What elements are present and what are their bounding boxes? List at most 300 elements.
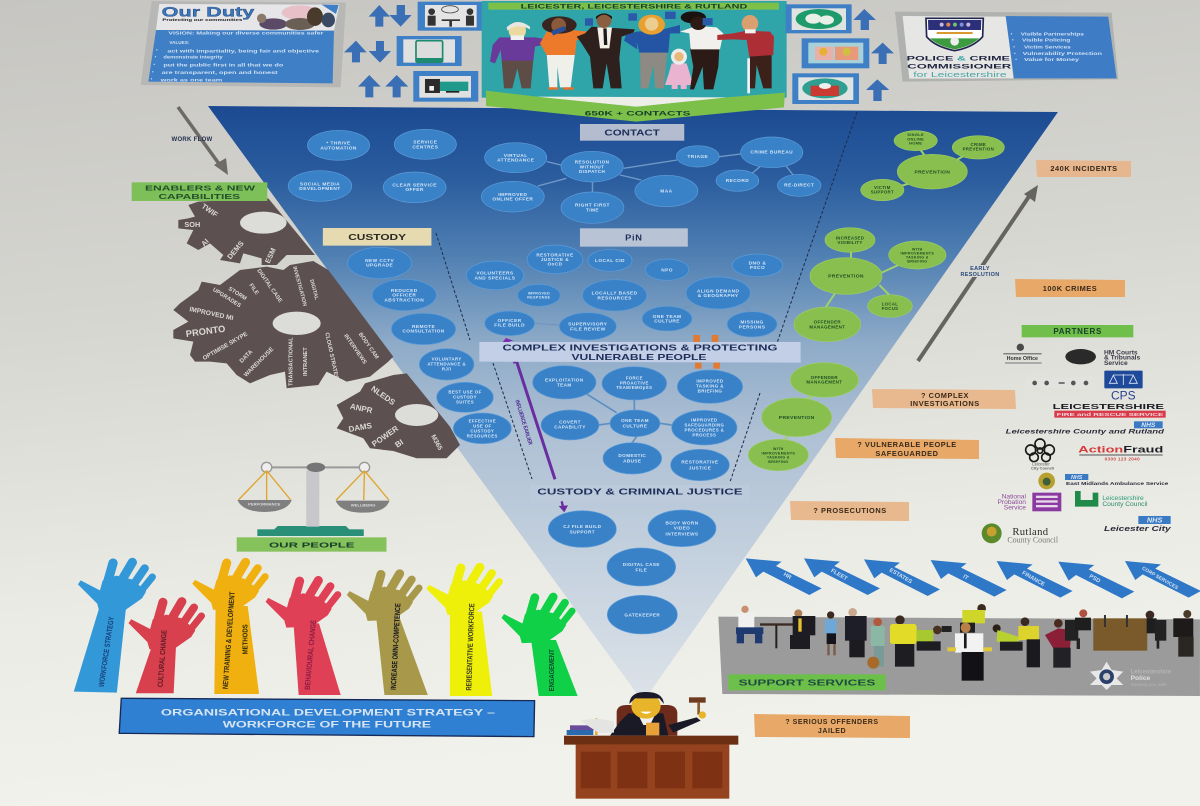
bubble: virtual attendance: VIRTUAL xyxy=(504,153,528,158)
bubble: domestic abuse: ABUSE xyxy=(623,458,641,463)
heading: enablers and new capabilities xyxy=(132,182,267,201)
banner: organisational development strategy: WORKFORCE OF THE FUTURE xyxy=(223,720,431,731)
arrow: IT: IT xyxy=(962,574,970,582)
heading: partners: PARTNERS xyxy=(1053,327,1102,336)
bubble: single online home: SINGLE xyxy=(907,132,924,137)
hand: new training and development methods xyxy=(192,562,265,694)
bubble: prevention: PREVENTION xyxy=(828,274,864,280)
gear: top: SOH xyxy=(184,220,200,229)
books and small scales xyxy=(567,718,614,735)
heading: contact xyxy=(580,124,684,141)
bubble: supervisory file review: SUPERVISORY xyxy=(568,322,608,327)
logo: National Probation Service: Probation xyxy=(997,499,1026,506)
logo: Leicester City Council: City Council xyxy=(1031,465,1054,470)
heading: complex investigations and protecting vulnerable people: COMPLEX INVESTIGATIONS & PROTECTING xyxy=(502,342,778,352)
bubble: right first time xyxy=(561,192,624,223)
bubble: align demand and geography: & GEOGRAPHY xyxy=(698,293,739,298)
logo: Rutland County Council xyxy=(982,523,1059,544)
logo: East Midlands Ambulance Service xyxy=(1038,473,1169,489)
gear: middle: INTERVIEWS xyxy=(342,333,367,366)
vision and values text: • xyxy=(155,55,157,60)
bubble: single online home xyxy=(894,131,937,151)
hand: new training and development methods: METHODS xyxy=(241,624,250,654)
bubble: volunteers and specials: VOLUNTEERS xyxy=(476,271,514,276)
priorities list: Victim Services xyxy=(1024,44,1071,49)
bubble: local focus xyxy=(868,295,912,317)
banner: 650K + contacts: 650K + CONTACTS xyxy=(585,110,691,117)
vision and values text: put the public first in all that we do xyxy=(163,63,284,68)
hand: new training and development methods: NEW TRAINING & DEVELOPMENT xyxy=(221,591,237,689)
gear: middle: DIGITAL CASE xyxy=(255,268,283,304)
bubble: right first time: RIGHT FIRST xyxy=(575,203,610,208)
logo text: police and crime commissioner for Leicestershire: COMMISSIONER xyxy=(907,64,1012,71)
bubble: resolution without dispatch xyxy=(561,151,623,182)
bubble: virtual attendance xyxy=(485,143,547,173)
bubble: effective use of custody resources: RESOURCES xyxy=(467,434,498,439)
heading: partners xyxy=(1022,325,1133,337)
bubble: officer file build: OFFICER xyxy=(498,318,522,323)
bubble: CJ file build support: CJ FILE BUILD xyxy=(563,524,602,529)
bubble: exploitation team: TEAM xyxy=(557,383,572,388)
bubble: one team culture: ONE TEAM xyxy=(653,314,682,319)
PiN connector lines xyxy=(534,295,750,325)
bubble: best use of custody suites: SUITES xyxy=(456,400,474,405)
bubble: resolution without dispatch: WITHOUT xyxy=(580,164,604,169)
gear: middle: BODY CAM xyxy=(357,332,380,361)
staff figures xyxy=(736,604,1194,681)
gear: bottom xyxy=(337,373,460,458)
bubble: remote consultation: CONSULTATION xyxy=(402,329,445,334)
bubble: locally based resources xyxy=(582,280,647,311)
heading: enablers and new capabilities: CAPABILITIES xyxy=(158,194,241,201)
gear: bottom: BI xyxy=(393,438,405,450)
panel: left contact channel icons xyxy=(344,2,482,102)
hand: representative workforce xyxy=(426,567,499,696)
bubble: new CCTV upgrade: NEW CCTV xyxy=(365,258,395,263)
logo: Home Office: Home Office xyxy=(1007,356,1038,362)
bubble: improved tasking and briefing: TASKING & xyxy=(696,384,724,389)
bubble: effective use of custody resources xyxy=(453,413,511,444)
gear: bottom: M365 xyxy=(429,434,443,452)
panel: judge at bench xyxy=(564,692,738,799)
figure: woman in blue xyxy=(624,12,680,88)
hand: behavioural change xyxy=(266,580,341,695)
heading: custody and criminal justice: CUSTODY & CRIMINAL JUSTICE xyxy=(537,486,743,496)
logo: East Midlands Ambulance Service: East Midlands Ambulance Service xyxy=(1066,481,1169,486)
bubble: offender management: OFFENDER xyxy=(814,320,841,325)
arrow: HR xyxy=(746,558,822,595)
logo: Leicestershire Police: Keeping you safe xyxy=(1131,682,1167,687)
logo: National Probation Service: National xyxy=(1002,493,1027,500)
bubble: improved safeguarding: IMPROVED xyxy=(691,418,717,423)
bubble: offender management: MANAGEMENT xyxy=(806,380,842,385)
outcome: serious offenders jailed: JAILED xyxy=(818,728,846,735)
arrow: corp services: CORP SERVICES xyxy=(1141,566,1180,592)
priorities list: Value for Money xyxy=(1024,57,1080,62)
bubble: clear service offer: OFFER xyxy=(405,187,424,192)
priorities list: Vulnerability Protection xyxy=(1023,51,1102,56)
heading: custody and criminal justice xyxy=(530,485,750,502)
connector lines xyxy=(538,154,793,193)
arrows: up and down xyxy=(344,5,412,97)
gear: middle: DIGITAL xyxy=(308,279,319,301)
bubble: volunteers and specials xyxy=(466,261,524,290)
bubble: local CID xyxy=(588,249,632,271)
priorities list: • xyxy=(1012,38,1014,43)
logo: Leicestershire Police: Police xyxy=(1131,675,1151,682)
bubble: triage: TRIAGE xyxy=(687,154,708,159)
gear: top: ESM xyxy=(263,246,278,265)
bubble: with improvements tasking and briefing: TASKING & xyxy=(906,256,929,260)
bubble: reduced officer abstraction: OFFICER xyxy=(392,293,417,298)
bubble: covert capability: COVERT xyxy=(559,420,581,425)
bubble: restorative justice: RESTORATIVE xyxy=(681,460,719,465)
bubble: new CCTV upgrade xyxy=(347,247,412,279)
icon: desktop computer xyxy=(413,71,478,102)
gear: bottom: NLEDS xyxy=(369,384,397,407)
bubble: one team culture: CULTURE xyxy=(654,319,680,324)
logo: Action Fraud xyxy=(1078,444,1163,461)
logo: CPS: CPS xyxy=(1111,388,1136,402)
collage of people xyxy=(257,5,339,30)
logo: National Probation Service: Service xyxy=(1004,504,1026,511)
bubble: body worn video interviews: BODY WORN xyxy=(665,520,699,525)
arrow: early resolution xyxy=(918,185,1038,361)
grey band xyxy=(718,617,1200,696)
gear: middle: CLOUD STRATEGY xyxy=(323,332,340,384)
bubble: missing persons xyxy=(727,312,777,337)
bubble: victim support xyxy=(861,179,904,201)
bubble: offender management xyxy=(790,363,858,397)
bubble: align demand and geography xyxy=(686,277,750,309)
judge chair xyxy=(617,705,677,736)
panel: title illustration, Leicester Leicestershire and Rutland xyxy=(482,1,787,122)
gear: middle: TRANSACTIONAL xyxy=(289,337,295,386)
gear: top: TWIF xyxy=(200,201,220,219)
logo strip: small crests xyxy=(1027,377,1093,388)
bubble: local focus: LOCAL xyxy=(882,301,898,306)
logo text: police and crime commissioner for Leicestershire xyxy=(907,56,1012,79)
gear: middle: INTRANET xyxy=(303,347,309,376)
bubble: improved response xyxy=(517,284,560,306)
priorities list: Visible Policing xyxy=(1022,38,1070,43)
bubble: voluntary attendance: ATTENDANCE & xyxy=(427,362,466,367)
logo: National Probation Service xyxy=(997,493,1061,511)
figure: child in pink xyxy=(665,49,693,89)
panel frame xyxy=(895,12,1118,82)
gear: bottom: POWER xyxy=(370,424,400,449)
bubble: prevention: PREVENTION xyxy=(779,415,815,421)
gear: middle: WAREHOUSE xyxy=(243,347,275,379)
bubble: victim support: SUPPORT xyxy=(871,190,894,195)
bubble: prevention xyxy=(810,258,882,294)
arrows: up xyxy=(853,9,894,101)
bubble: clear service offer: CLEAR SERVICE xyxy=(392,182,437,187)
icon: meeting xyxy=(418,2,482,31)
heading: custody: CUSTODY xyxy=(348,232,406,242)
icon: video call xyxy=(802,38,869,68)
logo: Leicestershire County Council xyxy=(1075,491,1148,508)
connector lines xyxy=(785,150,963,440)
bubble: thrive automation xyxy=(307,130,370,160)
heading: Leicester, Leicestershire and Rutland: LEICESTER, LEICESTERSHIRE & RUTLAND xyxy=(521,4,749,10)
bubble: MAA: MAA xyxy=(660,188,673,193)
figure: person in white top xyxy=(680,11,723,89)
gear: middle: STORM xyxy=(227,286,248,302)
arrow: early resolution: EARLY xyxy=(970,266,990,272)
logo: HM Courts and Tribunals Service: Service xyxy=(1104,360,1128,367)
outcome: serious offenders jailed xyxy=(754,714,910,738)
hand: workforce strategy: WORKFORCE STRATEGY xyxy=(97,616,116,688)
bubble: DNO and PSCO xyxy=(732,254,783,277)
outcome: vulnerable people safeguarded: SAFEGUARDED xyxy=(875,449,939,458)
heading: PiN: PiN xyxy=(625,233,643,242)
heading: enablers and new capabilities: ENABLERS & NEW xyxy=(145,185,256,192)
bubble: improved response: IMPROVED xyxy=(528,292,550,296)
banner: organisational development strategy: ORGANISATIONAL DEVELOPMENT STRATEGY – xyxy=(161,707,495,718)
bubble: improved online offer: IMPROVED xyxy=(498,192,528,197)
bubble: body worn video interviews xyxy=(648,510,716,547)
gear: top xyxy=(178,198,315,265)
logo: NHS Leicester City xyxy=(1104,516,1172,533)
bubble: best use of custody suites: BEST USE OF xyxy=(448,390,482,395)
vision and values text: • xyxy=(151,77,153,82)
panel: partners xyxy=(982,325,1172,544)
bubble: voluntary attendance: RJ/I xyxy=(442,367,451,372)
teal background xyxy=(482,1,787,98)
priorities list xyxy=(1006,16,1117,78)
bubble: restorative justice and OoCD: JUSTICE & xyxy=(541,257,569,262)
bubble: victim support: VICTIM xyxy=(874,185,891,190)
bubble: crime bureau xyxy=(741,137,803,168)
vision and values text: act with impartiality, being fair and objective xyxy=(167,48,320,53)
panel: right contact channel icons xyxy=(786,4,894,104)
logo: Leicestershire Fire and Rescue Service: FIRE and RESCUE SERVICE xyxy=(1057,412,1164,418)
orange connector tabs xyxy=(693,335,720,369)
icon: tablet xyxy=(397,36,462,66)
gear: middle: IMPROVED MI xyxy=(189,306,234,322)
arrow: IT xyxy=(931,560,1007,597)
title: our duty: Protecting our communities xyxy=(162,18,242,22)
bubble: effective use of custody resources: USE OF xyxy=(473,424,492,429)
bubble: effective use of custody resources: CUSTODY xyxy=(470,429,494,434)
bubble: supervisory file review xyxy=(559,313,616,340)
gear: bottom: ANPR xyxy=(349,402,373,415)
bubble: with improvements tasking and briefing: BRIEFING xyxy=(907,260,927,264)
logo: Leicestershire Police xyxy=(1090,662,1172,690)
logo: NHS Leicester City: Leicester City xyxy=(1104,524,1172,533)
bubble: single online home: HOME xyxy=(909,141,922,146)
heading: our people xyxy=(237,537,386,552)
priorities list: Visible Partnerships xyxy=(1021,31,1085,36)
bubble: restorative justice and OoCD: OoCD xyxy=(548,262,563,267)
panel: our people and workforce hands xyxy=(74,462,578,737)
gear: middle: OPTIMISE SKYPE xyxy=(202,332,249,362)
bubble: local CID: LOCAL CID xyxy=(595,258,625,263)
bubble: exploitation team xyxy=(533,366,596,399)
figure: woman in orange xyxy=(540,16,588,90)
arrow: PSD: PSD xyxy=(1088,574,1101,585)
bubble: improved safeguarding: PROCEDURES & xyxy=(684,428,724,433)
gear: top: AI xyxy=(199,237,211,248)
white logo area xyxy=(903,16,1013,79)
vision and values text: work as one team xyxy=(159,77,222,82)
logo: HM Courts and Tribunals Service xyxy=(1065,349,1141,367)
panel: support services xyxy=(718,558,1200,696)
bubble: restorative justice and OoCD xyxy=(527,245,583,274)
bubble: remote consultation xyxy=(391,313,456,345)
bubble: new CCTV upgrade: UPGRADE xyxy=(366,263,393,268)
panel: inverted triangle operating model xyxy=(208,106,1058,702)
logo: Leicestershire Fire and Rescue Service: LEICESTERSHIRE xyxy=(1053,402,1164,411)
outcome: complex investigations: INVESTIGATIONS xyxy=(910,399,980,408)
bubble: single online home: ONLINE xyxy=(907,136,924,141)
bubble: crime prevention: CRIME xyxy=(971,142,986,147)
bubble: gatekeeper xyxy=(607,595,677,634)
bubble: virtual attendance: ATTENDANCE xyxy=(497,158,534,163)
bubble: one team culture: ONE TEAM xyxy=(621,418,649,423)
bubble: best use of custody suites: CUSTODY xyxy=(453,395,477,400)
bubble: with improvements tasking and briefing: IMPROVEMENTS xyxy=(761,451,795,455)
arrow: fleet: FLEET xyxy=(830,568,849,582)
bubble: with improvements tasking and briefing: IMPROVEMENTS xyxy=(900,252,934,256)
banner: 650K + contacts xyxy=(486,91,785,122)
connector lines xyxy=(587,394,672,443)
bubble: crime prevention xyxy=(952,136,1004,159)
bubble: volunteers and specials: AND SPECIALS xyxy=(474,275,515,280)
bubble: prevention xyxy=(897,154,967,189)
bubble: record xyxy=(716,170,759,191)
influence earlier arrow: INFLUENCE EARLIER xyxy=(513,399,533,446)
bubble: force proactive team: FORCE xyxy=(626,376,643,381)
bubble: offender management xyxy=(794,307,861,342)
arrow: finance: FINANCE xyxy=(1021,570,1046,588)
bubble: improved safeguarding: SAFEGUARDING xyxy=(684,423,724,428)
bubble: improved online offer: ONLINE OFFER xyxy=(492,197,534,202)
bubble: with improvements tasking and briefing: TASKING & xyxy=(767,456,790,460)
bubble: locally based resources: LOCALLY BASED xyxy=(592,291,638,296)
logo text: police and crime commissioner for Leicestershire: POLICE & CRIME xyxy=(907,56,1011,63)
bubble: clear service offer xyxy=(383,172,446,203)
arrow: early resolution: RESOLUTION xyxy=(960,272,1000,278)
heading: support services xyxy=(728,674,886,690)
bubble: record: RECORD xyxy=(726,178,749,183)
bubble: officer file build: FILE BUILD xyxy=(494,323,525,328)
hand: engagement xyxy=(501,597,578,696)
logo: Leicestershire County Council: Leicestershire xyxy=(1102,495,1144,502)
bubble: with improvements tasking and briefing: WITH xyxy=(773,447,784,451)
title: our duty: Our Duty xyxy=(162,4,255,20)
bubble: with improvements tasking and briefing: BRIEFING xyxy=(768,460,788,464)
outcome: 100K crimes xyxy=(1015,279,1125,297)
heading: contact: CONTACT xyxy=(604,128,661,137)
bubble: offender management: MANAGEMENT xyxy=(809,324,845,329)
bubble: local focus: FOCUS xyxy=(882,306,898,311)
dashed divider lines xyxy=(436,112,857,482)
outcome: vulnerable people safeguarded: ? VULNERABLE PEOPLE xyxy=(857,440,957,449)
icon: balance scales: PERFORMANCE xyxy=(248,502,281,507)
arrow: estates: ESTATES xyxy=(888,568,913,585)
logo: Leicestershire Fire and Rescue Service xyxy=(1053,402,1166,418)
heading: custody xyxy=(323,228,431,246)
bubble: MAA xyxy=(635,175,698,207)
panel: enablers and new capabilities xyxy=(132,182,460,458)
vision and values text xyxy=(148,30,334,83)
hand: behavioural change: BEHAVIOURAL CHANGE xyxy=(303,620,318,690)
bubble: force proactive team xyxy=(602,367,667,400)
triangle background xyxy=(208,106,1058,702)
bubble: officer file build xyxy=(485,311,535,336)
heading: PiN xyxy=(580,228,688,247)
panel: police and crime commissioner xyxy=(895,12,1118,82)
figure: older woman xyxy=(490,22,553,88)
bubble: voluntary attendance xyxy=(419,349,474,380)
bubble: digital case file xyxy=(607,548,676,586)
icon: email xyxy=(792,73,859,104)
outcome: 100K crimes: 100K CRIMES xyxy=(1043,284,1097,293)
bubble: thrive automation: * THRIVE xyxy=(326,141,351,146)
bubble: improved tasking and briefing: BRIEFING xyxy=(698,389,722,394)
heading: complex investigations and protecting vulnerable people: VULNERABLE PEOPLE xyxy=(571,352,707,362)
bubble: right first time: TIME xyxy=(586,207,599,212)
priorities list: • xyxy=(1015,57,1017,62)
bubble: best use of custody suites xyxy=(437,382,493,412)
arrow: fleet xyxy=(804,558,880,595)
bubble: improved tasking and briefing: IMPROVED xyxy=(696,379,724,384)
bubble: covert capability: CAPABILITY xyxy=(554,425,586,430)
bubble: re-direct xyxy=(777,174,821,196)
bubble: prevention xyxy=(762,398,832,437)
priorities list: • xyxy=(1013,44,1015,49)
gear: middle: FILE xyxy=(247,283,260,296)
arrow: corp services xyxy=(1125,561,1200,598)
bubble: reduced officer abstraction: REDUCED xyxy=(391,288,418,293)
arrow: finance xyxy=(997,561,1073,598)
bubble: restorative justice xyxy=(671,449,729,481)
bubble: increased visibility: VISIBILITY xyxy=(837,240,863,245)
logo: HM Courts and Tribunals Service: & Tribunals xyxy=(1104,355,1141,362)
bubble: social media development: DEVELOPMENT xyxy=(299,186,341,191)
bubble: resolution without dispatch: RESOLUTION xyxy=(575,160,609,165)
hand: representative workforce: RERESENTATIVE WORKFORCE xyxy=(464,603,476,691)
bubble: increased visibility: INCREASED xyxy=(836,235,864,240)
bubble: restorative justice: JUSTICE xyxy=(689,465,711,470)
bubble: offender management: OFFENDER xyxy=(811,375,838,380)
bubble: improved safeguarding xyxy=(672,410,737,445)
figure: man in suit xyxy=(577,13,637,88)
heading: support services: SUPPORT SERVICES xyxy=(739,678,876,688)
logo: NHS Leicester City: NHS xyxy=(1147,516,1162,525)
bubble: CJ file build support: SUPPORT xyxy=(570,530,595,535)
heading: our people: OUR PEOPLE xyxy=(269,541,354,550)
bubble: exploitation team: EXPLOITATION xyxy=(545,378,584,383)
bubble: body worn video interviews: VIDEO xyxy=(674,526,690,531)
gear: middle: INVESTIGATION xyxy=(291,266,308,307)
vision and values text: • xyxy=(156,47,158,52)
bubble: NPO xyxy=(645,259,689,280)
panel: our duty xyxy=(141,1,346,87)
bubble: one team culture xyxy=(642,306,692,331)
panel header background xyxy=(156,4,339,31)
arrow: HR: HR xyxy=(782,572,792,581)
bubble: voluntary attendance: VOLUNTARY xyxy=(432,357,462,362)
bubble: thrive automation: AUTOMATION xyxy=(320,145,357,150)
vision and values text: • xyxy=(152,69,154,74)
bubble: crime prevention: PREVENTION xyxy=(963,147,994,152)
logo: Action Fraud: Action Fraud xyxy=(1078,444,1163,454)
outcome: complex investigations: ? COMPLEX xyxy=(921,391,969,400)
priorities list: • xyxy=(1011,31,1013,36)
